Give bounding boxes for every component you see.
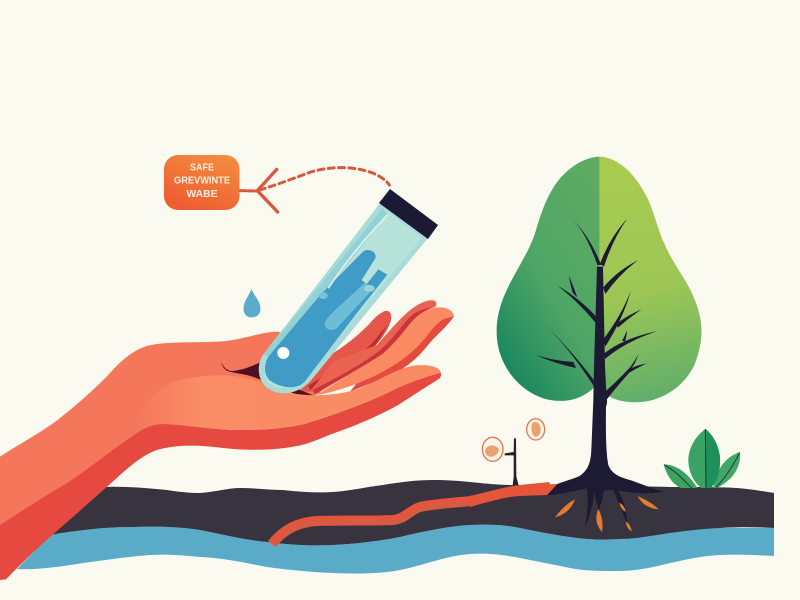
glass body xyxy=(259,203,428,393)
pipe running through the soil xyxy=(272,484,559,544)
arm underside shadow xyxy=(0,373,441,580)
label tag: WABE xyxy=(186,189,218,200)
tree branches xyxy=(536,218,658,402)
ring finger xyxy=(318,307,454,395)
seed circle left xyxy=(482,437,503,461)
index finger xyxy=(300,311,391,392)
liquid xyxy=(265,250,387,387)
glass shaded left band xyxy=(263,208,387,357)
palm crease xyxy=(221,362,317,397)
tree trunk and roots xyxy=(547,267,663,527)
orange root tips xyxy=(555,496,659,532)
soil layer xyxy=(50,480,774,545)
groundwater band xyxy=(17,525,774,574)
test tube xyxy=(259,189,438,393)
seed circle right xyxy=(527,419,545,440)
tube cap xyxy=(379,189,438,239)
left leaf xyxy=(664,464,697,488)
label tag: SAFE xyxy=(190,162,214,174)
liquid highlight streak xyxy=(325,283,373,330)
water drop xyxy=(244,289,260,318)
palm and thumb xyxy=(135,365,441,432)
bubble upper xyxy=(364,285,375,292)
small plant xyxy=(664,429,740,488)
label tag xyxy=(164,155,240,210)
glass inner xyxy=(264,208,422,388)
tree crown xyxy=(497,157,701,402)
middle finger xyxy=(310,300,437,394)
bubble xyxy=(319,292,328,299)
white highlight xyxy=(277,347,289,359)
centre leaf xyxy=(688,429,720,488)
tree xyxy=(497,157,701,532)
forearm and back of hand xyxy=(0,332,333,528)
seedling stem xyxy=(505,438,519,485)
hand holding the tube xyxy=(0,300,454,580)
dashed arrow from tube to label xyxy=(240,168,389,212)
right leaf xyxy=(713,452,740,488)
glass reflection xyxy=(328,215,387,288)
seedling with seed circles xyxy=(482,419,545,485)
label tag: GREVWINTE xyxy=(174,176,230,186)
